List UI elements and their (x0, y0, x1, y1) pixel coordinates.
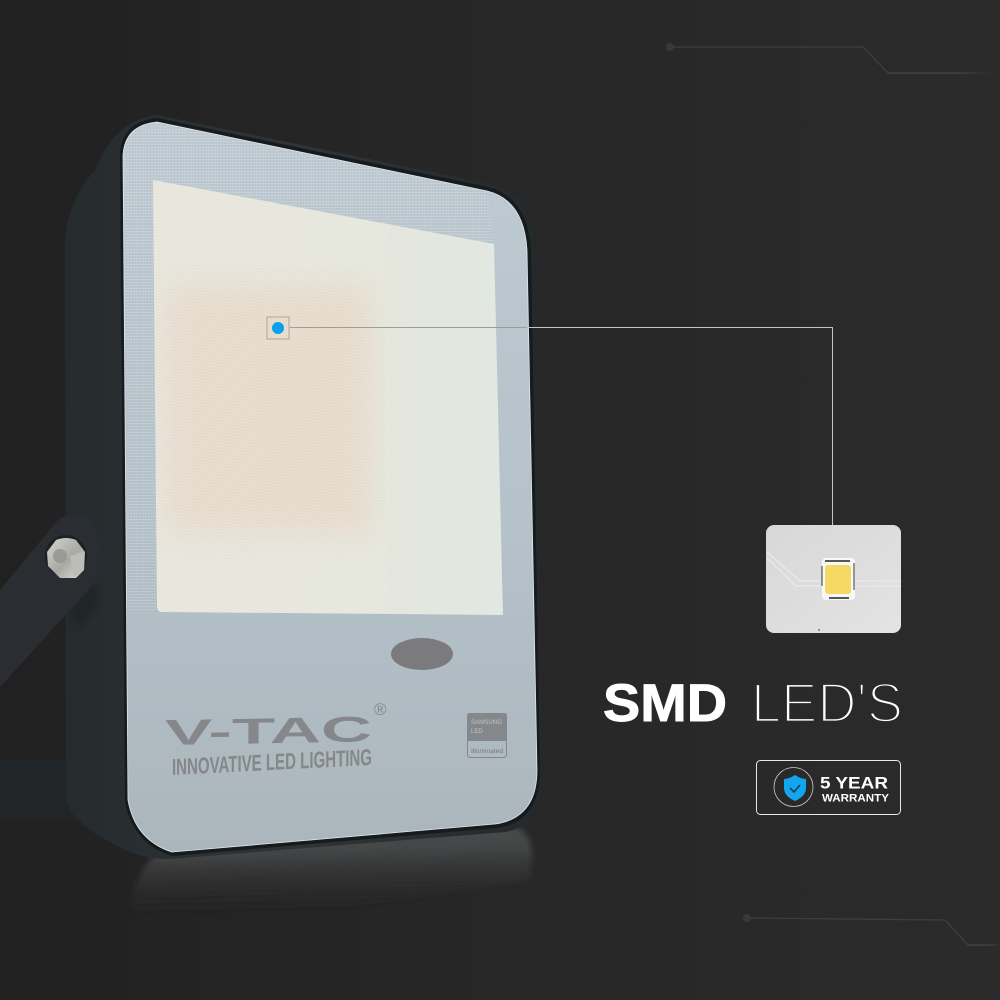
floodlight (65, 115, 542, 859)
chip housing (822, 558, 855, 600)
Samsung badge: Illuminated (471, 749, 503, 755)
icon: bolt (45, 535, 87, 578)
Samsung badge (467, 713, 507, 758)
title: SMD LED'S (603, 671, 903, 734)
glass front (123, 122, 537, 852)
registered mark: ® (374, 700, 387, 719)
V-TAC logo: V-TAC (165, 708, 372, 753)
sensor (391, 638, 453, 670)
title: SMD LED'S: SMD (603, 674, 727, 733)
callout connector (290, 328, 832, 525)
tagline: INNOVATIVE LED LIGHTING (172, 744, 372, 780)
chip contacts (825, 561, 850, 598)
V-TAC logo (165, 700, 387, 780)
panel base (150, 175, 506, 620)
housing (65, 115, 542, 859)
Samsung badge: SAMSUNG (471, 720, 502, 726)
glass texture (123, 122, 495, 612)
warranty badge (756, 760, 900, 814)
chip emitter (825, 565, 851, 594)
bracket shadow (70, 580, 97, 628)
panel ribs (150, 175, 390, 615)
housing front rim (120, 118, 540, 856)
mounting cylinder (0, 760, 90, 820)
circuit traces (767, 552, 901, 586)
SMD chip card (766, 525, 901, 633)
floodlight reflection (128, 825, 532, 915)
decorative circuit line: top right (666, 43, 993, 74)
warranty badge: WARRANTY (822, 792, 890, 804)
title: SMD LED'S: LED'S (751, 671, 903, 734)
decorative circuit line: bottom right (743, 914, 1000, 946)
mounting bracket (0, 515, 98, 687)
warm LED glow (166, 285, 371, 535)
Samsung badge: LED (471, 729, 483, 735)
icon: shield (774, 768, 813, 806)
warranty text: 5 YEAR (820, 774, 888, 792)
lit LED panel (150, 175, 506, 620)
callout marker (267, 317, 289, 339)
